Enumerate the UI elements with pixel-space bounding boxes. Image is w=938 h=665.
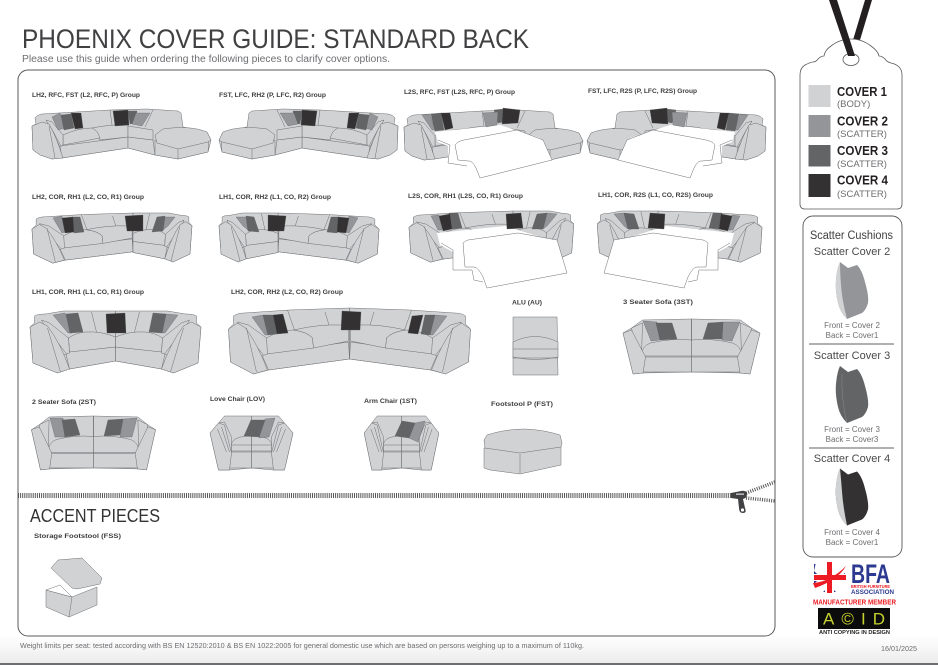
sofa bed drawing: [404, 108, 583, 178]
label: 3 Seater Sofa (3ST): [623, 299, 693, 306]
product: ALU: [512, 300, 558, 375]
product: LH2 COR RH2 group: [228, 289, 470, 374]
BFA wordmark: BFA: [851, 559, 890, 589]
tag eyelet: [843, 54, 859, 66]
cover 1 label: COVER 1: [837, 84, 887, 99]
cover 2 label: (SCATTER): [837, 129, 887, 140]
title: PHOENIX COVER GUIDE: STANDARD BACK: [22, 24, 529, 54]
sofa drawing: [228, 308, 470, 374]
product: 3 seater sofa: [623, 299, 760, 374]
label: LH1, COR, RH1 (L1, CO, R1) Group: [32, 289, 144, 296]
product: LH1 COR R2S group: [597, 192, 762, 288]
icon: cushion cover 4: [836, 468, 868, 526]
icon: cushion cover 3: [836, 366, 868, 423]
cover 4 label: (SCATTER): [837, 189, 887, 200]
sofa drawing: [32, 109, 211, 159]
sofa drawing: [623, 319, 760, 374]
label: L2S, COR, RH1 (L2S, CO, R1) Group: [408, 193, 523, 200]
label: LH2, COR, RH2 (L2, CO, R2) Group: [231, 289, 343, 296]
scatter cover 3 group: Scatter Cover 3: [814, 350, 890, 362]
zipper divider: [18, 482, 775, 513]
storage footstool drawing: [46, 558, 102, 617]
sofa drawing: [219, 109, 398, 159]
chair drawing: [210, 416, 293, 470]
date: 16/01/2025: [881, 644, 917, 653]
icon: ribbon through eyelet: [829, 0, 855, 56]
product: LH1 COR RH2 group: [219, 194, 379, 263]
product: FST LFC RH2 group: [219, 92, 398, 159]
label: Footstool P (FST): [491, 401, 553, 408]
product: L2S COR RH1 group: [408, 193, 574, 288]
divider: [809, 447, 894, 449]
product: LH1 COR RH1 group: [30, 289, 201, 373]
sofa drawing: [31, 416, 156, 470]
scatter cover 3 group: [814, 350, 890, 444]
product: LH2 RFC FST group: [32, 92, 211, 159]
scatter cover 2 group: Back = Cover1: [826, 331, 879, 340]
cover 2 label: COVER 2: [837, 114, 888, 128]
page bottom edge: [0, 663, 938, 665]
cover 3 label: (SCATTER): [837, 159, 887, 170]
label: 2 Seater Sofa (2ST): [32, 399, 96, 406]
label: L2S, RFC, FST (L2S, RFC, P) Group: [404, 89, 515, 96]
product: 2 seater sofa: [31, 399, 156, 470]
label: Arm Chair (1ST): [364, 398, 417, 405]
swatch: cover 2: [808, 115, 830, 137]
product: LH2 COR RH1 group: [32, 194, 192, 263]
scatter cover 2 group: [814, 246, 890, 340]
icon: union flag: [813, 562, 846, 593]
cover 1 label: (BODY): [837, 99, 870, 110]
scatter cover 4 group: Front = Cover 4: [824, 528, 880, 537]
product: love chair: [210, 396, 293, 470]
logo: ACID: [818, 608, 890, 636]
label: Storage Footstool (FSS): [34, 533, 121, 540]
panel: scatter cushions: [803, 216, 902, 557]
sofa drawing: [219, 213, 379, 263]
manufacturer member text: MANUFACTURER MEMBER: [813, 600, 896, 606]
logo: British Furniture Association: [813, 559, 894, 596]
footer weight note: Weight limits per seat: tested according with BS EN 12520:2010 & BS EN 1022:2005 for general domestic use which are based on persons weighing up to a maximum of 110kg.: [20, 641, 584, 650]
label: Love Chair (LOV): [210, 396, 265, 403]
label: FST, LFC, RH2 (P, LFC, R2) Group: [219, 92, 326, 99]
background footer shade: [0, 636, 938, 663]
scatter cover 4 group: Scatter Cover 4: [814, 453, 890, 465]
association text: ASSOCIATION: [851, 589, 894, 596]
swatch: cover 4: [808, 174, 830, 197]
cover 4 label: COVER 4: [837, 172, 889, 188]
scatter cover 4 group: [814, 453, 890, 547]
logo: ACID: A©ID: [823, 610, 885, 628]
label: FST, LFC, R2S (P, LFC, R2S) Group: [588, 88, 697, 95]
scatter cover 4 group: Back = Cover1: [826, 538, 879, 547]
sofa bed drawing: [409, 211, 574, 288]
association text: BRITISH FURNITURE: [851, 584, 891, 590]
product: FST LFC R2S group: [587, 88, 766, 178]
icon: ribbon behind tag: [853, 0, 872, 40]
divider: [809, 343, 894, 345]
scatter cover 2 group: Front = Cover 2: [824, 321, 880, 330]
swatch: cover 3: [808, 145, 830, 166]
label: LH2, COR, RH1 (L2, CO, R1) Group: [32, 194, 144, 201]
subtitle: Please use this guide when ordering the following pieces to clarify cover options.: [22, 54, 390, 65]
label: LH1, COR, RH2 (L1, CO, R2) Group: [219, 194, 331, 201]
product: footstool P: [484, 401, 562, 474]
sofa drawing: [32, 213, 192, 263]
label: LH1, COR, R2S (L1, CO, R2S) Group: [598, 192, 713, 199]
product: arm chair: [364, 398, 439, 470]
product: L2S RFC FST group: [404, 89, 583, 178]
scatter cover 2 group: Scatter Cover 2: [814, 246, 890, 258]
panel: main product area: [18, 70, 775, 636]
label: LH2, RFC, FST (L2, RFC, P) Group: [32, 92, 140, 99]
cover 3 label: COVER 3: [837, 143, 888, 158]
sofa bed drawing: [597, 211, 762, 288]
sofa bed drawing: [587, 108, 766, 178]
accent pieces heading: ACCENT PIECES: [30, 506, 160, 526]
product: storage footstool: [34, 533, 121, 617]
icon: cushion cover 2: [836, 262, 868, 319]
swatch: cover 1: [808, 85, 830, 107]
logo: ACID: ANTI COPYING IN DESIGN: [819, 630, 890, 636]
sofa drawing: [30, 311, 201, 373]
swatch tag panel: [800, 0, 902, 209]
scatter cover 3 group: Front = Cover 3: [824, 425, 880, 434]
footstool drawing: [484, 429, 562, 474]
chair drawing: [364, 416, 439, 470]
label: ALU (AU): [512, 300, 542, 306]
armless unit drawing: [513, 317, 558, 375]
heading: scatter cushions: Scatter Cushions: [810, 230, 893, 242]
scatter cover 3 group: Back = Cover3: [826, 435, 879, 444]
